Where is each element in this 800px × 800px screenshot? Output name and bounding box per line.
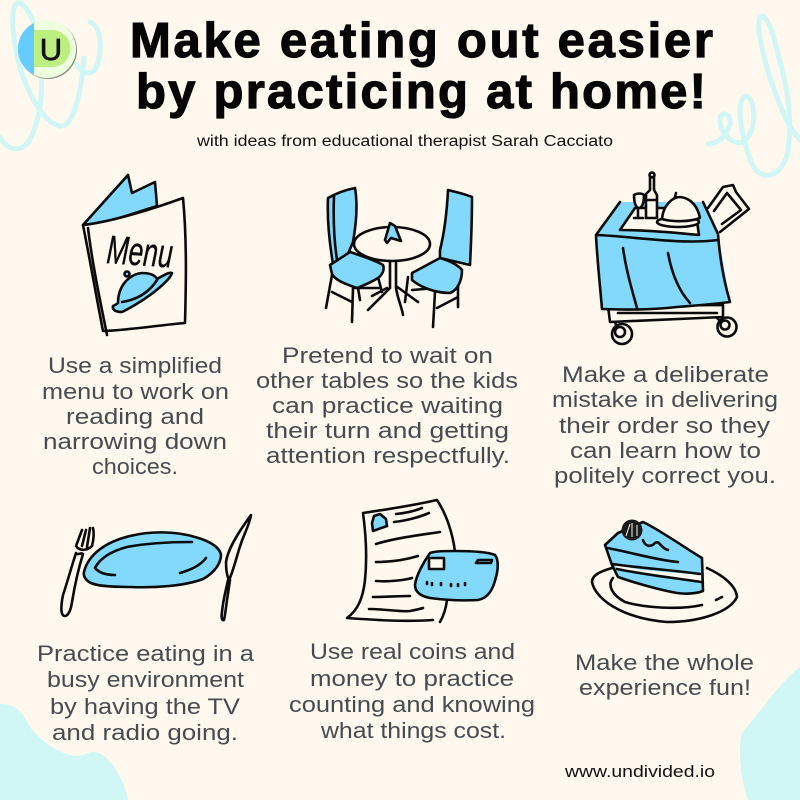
title: Make eating out easier bbox=[130, 14, 713, 68]
decoration: bottom-left blob bbox=[0, 704, 128, 800]
left chair bbox=[326, 275, 382, 322]
text: deliberate mistake: politely correct you. bbox=[554, 463, 776, 488]
knife bbox=[222, 515, 251, 620]
decoration: right squiggle bbox=[708, 16, 800, 175]
wine glass bbox=[634, 194, 644, 208]
text: wait on tables bbox=[256, 343, 518, 468]
plate bbox=[84, 532, 221, 587]
cart shelf and wheels bbox=[608, 305, 723, 322]
icon: plate, fork and knife bbox=[61, 515, 251, 620]
cake plate bbox=[592, 568, 737, 622]
round table bbox=[354, 227, 430, 261]
decoration: bottom-right blob bbox=[740, 667, 800, 800]
decoration: left squiggle bbox=[0, 3, 100, 149]
text: make it fun: Make the whole bbox=[575, 650, 754, 675]
text: simplified menu: Use a simplified bbox=[48, 353, 222, 378]
text: wait on tables: other tables so the kids bbox=[256, 368, 518, 393]
text: deliberate mistake: mistake in delivering bbox=[552, 387, 778, 412]
credit card bbox=[415, 551, 498, 600]
text: busy environment: by having the TV bbox=[50, 694, 240, 719]
table tent card bbox=[385, 223, 401, 243]
text: coins and money: Use real coins and bbox=[310, 639, 515, 664]
wine bottle bbox=[646, 177, 657, 218]
text: deliberate mistake bbox=[552, 362, 778, 488]
text: simplified menu bbox=[42, 353, 229, 479]
text: wait on tables: Pretend to wait on bbox=[282, 343, 493, 368]
text: simplified menu: reading and bbox=[66, 404, 204, 429]
text: busy environment: Practice eating in a bbox=[37, 641, 255, 666]
logo: Undivided U badge bbox=[18, 20, 77, 79]
cream swirl bbox=[622, 520, 642, 540]
text: deliberate mistake: can learn how to bbox=[570, 438, 761, 463]
icon: cake slice bbox=[592, 520, 737, 622]
subtitle: with ideas from educational therapist Sarah Cacciato bbox=[196, 133, 613, 150]
text: busy environment: and radio going. bbox=[52, 720, 238, 745]
text: make it fun bbox=[575, 650, 754, 700]
text: simplified menu: narrowing down bbox=[43, 429, 227, 454]
title: by practicing at home! bbox=[136, 65, 706, 119]
text: deliberate mistake: Make a deliberate bbox=[562, 362, 769, 387]
icon: serving cart bbox=[596, 172, 749, 344]
logo: Undivided U badge: U bbox=[40, 32, 62, 67]
text: wait on tables: their turn and getting bbox=[266, 418, 509, 443]
text: coins and money: counting and knowing bbox=[289, 692, 535, 717]
icon: bill and credit card bbox=[347, 500, 498, 622]
icon: menu bbox=[83, 175, 186, 335]
text: busy environment: busy environment bbox=[47, 667, 245, 692]
text: coins and money bbox=[289, 639, 535, 743]
cloth top bbox=[596, 202, 730, 310]
text: coins and money: what things cost. bbox=[320, 718, 506, 743]
icon: table and chairs bbox=[326, 188, 472, 327]
website: www.undivided.io bbox=[564, 762, 715, 781]
napkin bbox=[620, 208, 699, 235]
bill bbox=[347, 500, 455, 622]
text: deliberate mistake: their order so they bbox=[559, 413, 771, 438]
cake body bbox=[605, 522, 703, 594]
text: make it fun: experience fun! bbox=[579, 675, 751, 700]
text: simplified menu: choices. bbox=[92, 454, 178, 479]
text: busy environment bbox=[37, 641, 255, 745]
title bbox=[130, 14, 713, 119]
text: wait on tables: attention respectfully. bbox=[266, 443, 510, 468]
fork bbox=[61, 528, 94, 616]
right chair bbox=[405, 277, 458, 327]
cloche bbox=[657, 217, 699, 227]
text: simplified menu: menu to work on bbox=[42, 379, 229, 404]
menu handwriting: Menu bbox=[105, 228, 174, 277]
cart handle bbox=[708, 185, 749, 232]
text: wait on tables: can practice waiting bbox=[272, 393, 503, 418]
text: coins and money: money to practice bbox=[310, 666, 514, 691]
